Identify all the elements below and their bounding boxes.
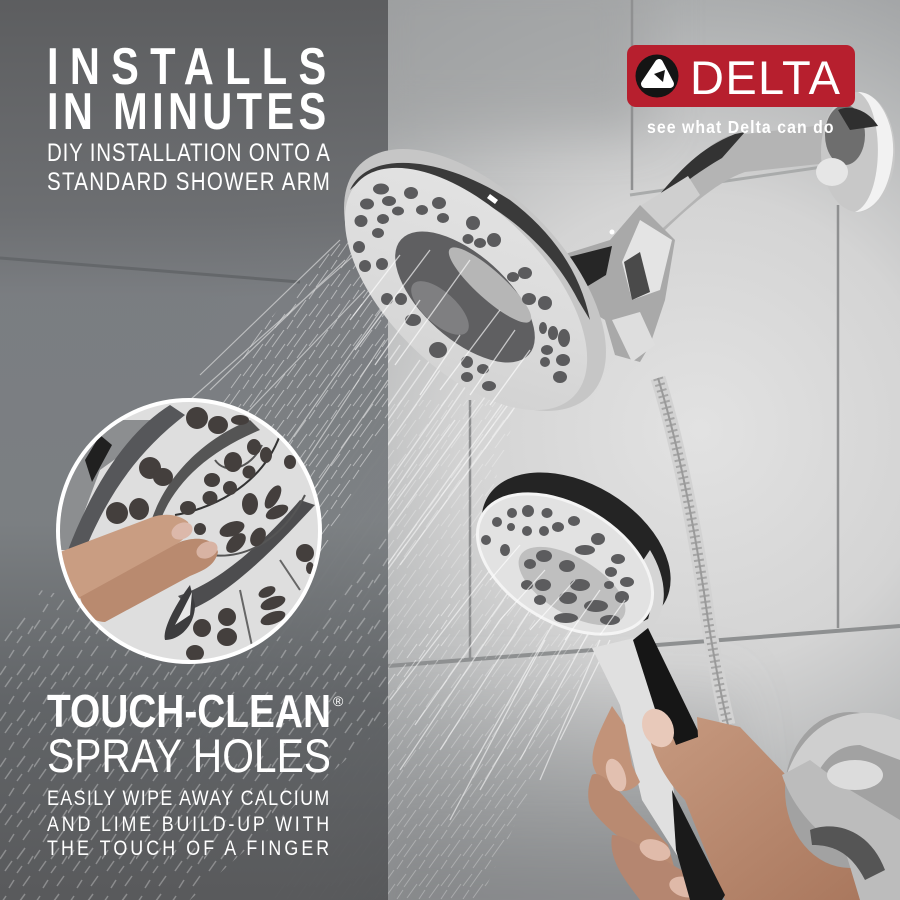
hand shower handle	[592, 628, 700, 860]
heading: touch-clean spray holes: SPRAY HOLES	[47, 729, 331, 782]
panel tile line	[0, 258, 300, 282]
Delta logo	[627, 45, 855, 107]
water lines over the head	[350, 250, 530, 405]
spray holes	[353, 184, 570, 391]
head rim	[298, 103, 652, 457]
heading: installs in minutes: IN MINUTES	[47, 82, 326, 140]
flexible hose	[658, 378, 728, 725]
hand holding the shower	[588, 704, 885, 900]
inset chrome backdrop	[60, 402, 318, 660]
heading: installs in minutes: INSTALLS	[47, 37, 326, 95]
logo wordmark: DELTA	[690, 51, 841, 104]
inset finger nails	[172, 522, 192, 540]
text: wipe away calcium: AND LIME BUILD-UP WITH	[47, 813, 329, 836]
heading: touch-clean spray holes: ®	[333, 693, 344, 709]
ring finger	[611, 835, 702, 900]
water mist over the panel	[0, 230, 390, 900]
text: DIY installation: STANDARD SHOWER ARM	[47, 167, 330, 195]
inset diverter tab	[165, 585, 195, 640]
swivel mount	[562, 205, 675, 362]
inset spray holes	[106, 407, 314, 661]
spray from rain shower head (right of panel)	[180, 320, 600, 900]
index finger	[592, 706, 640, 791]
centre recess	[373, 208, 557, 386]
heading: touch-clean spray holes	[47, 685, 344, 782]
tagline: see what Delta can do	[647, 117, 834, 137]
dark translucent left panel	[0, 0, 388, 900]
logo mark	[636, 54, 678, 98]
circular inset: touch-clean close-up	[55, 395, 325, 670]
middle finger	[588, 774, 675, 870]
tub faucet handle	[782, 712, 900, 900]
inset fingers	[60, 515, 189, 600]
text: DIY installation	[47, 138, 331, 195]
back shell	[454, 440, 698, 660]
nozzles	[481, 505, 634, 625]
text: wipe away calcium: THE TOUCH OF A FINGER	[47, 837, 329, 860]
hand shower head	[453, 440, 698, 663]
heading: touch-clean spray holes: TOUCH-CLEAN	[47, 685, 331, 737]
text: wipe away calcium: EASILY WIPE AWAY CALCIUM	[47, 787, 329, 810]
handle lower black stripe	[672, 790, 725, 900]
head face	[303, 126, 629, 452]
hand shower water spray	[390, 570, 610, 820]
rain shower head	[298, 103, 652, 457]
heading: installs in minutes	[47, 37, 326, 140]
shower arm and wall flange	[640, 92, 895, 240]
text: wipe away calcium	[47, 787, 329, 860]
text: DIY installation: DIY INSTALLATION ONTO A	[47, 138, 331, 166]
back of hand and thumb	[646, 714, 885, 900]
chrome face	[453, 465, 677, 663]
